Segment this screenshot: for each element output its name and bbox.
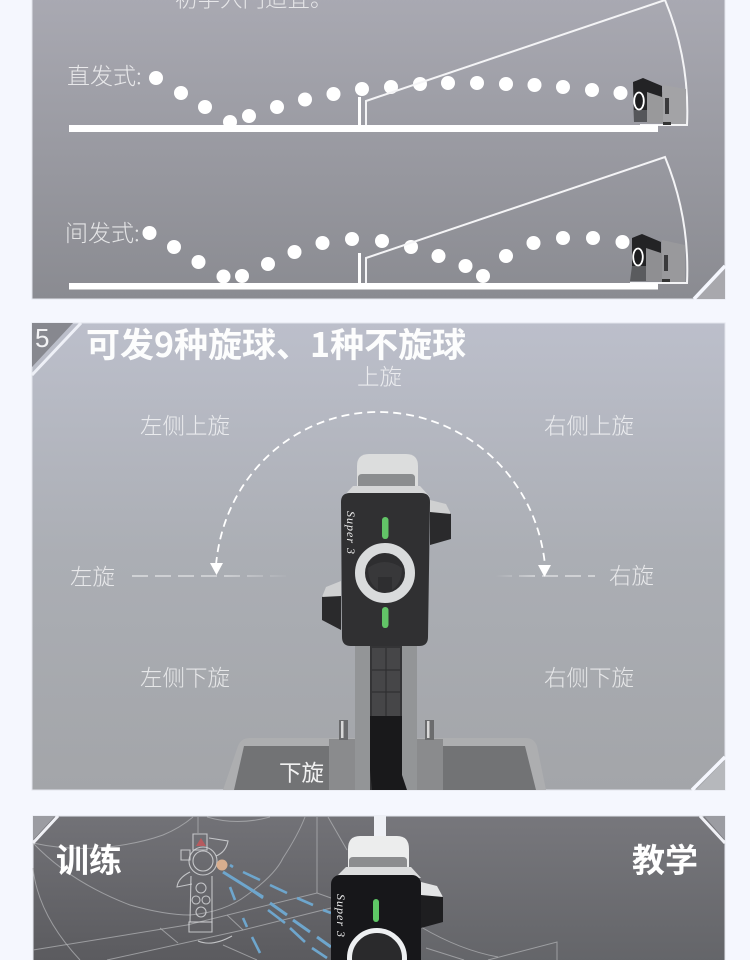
blue ball trajectories (223, 865, 331, 958)
mounting knobs (339, 720, 434, 740)
collar (335, 867, 421, 878)
brand mark: Super 3 (334, 894, 348, 938)
machine head (322, 454, 451, 646)
panel 1 background (32, 0, 725, 299)
spin labels: 左侧下旋 (140, 661, 230, 693)
wireframe court (33, 817, 557, 960)
dashed spin arc with arrows (210, 412, 551, 577)
panel: training and teaching (33, 816, 725, 960)
table and sector: direct serve (69, 0, 687, 132)
corner accent left (33, 816, 58, 843)
corner accent (694, 266, 725, 299)
ring (360, 548, 410, 598)
table and sector: indirect serve (69, 157, 687, 290)
corner accent with number (32, 323, 81, 375)
white top cap (357, 454, 418, 488)
spin labels: 右侧上旋 (544, 409, 634, 441)
spin labels: 上旋 (357, 360, 402, 392)
right wing (430, 511, 451, 545)
white collar (343, 486, 430, 497)
small machine: indirect serve (630, 234, 685, 282)
left wing top (322, 581, 341, 597)
right wing top (430, 500, 451, 514)
panel 2 background (32, 323, 725, 790)
right wing (421, 894, 443, 928)
right wing top (421, 882, 443, 897)
orange ball (216, 860, 228, 870)
panel title: 可发9种旋球、1种不旋球 (86, 318, 466, 367)
left dashed axis (132, 575, 290, 577)
left half background (34, 817, 374, 960)
spin labels: 右旋 (609, 559, 654, 591)
pillar (355, 646, 417, 790)
panel 3 background (33, 816, 725, 960)
white cap (348, 836, 409, 870)
ring (350, 930, 404, 960)
brand mark: Super 3 (344, 511, 358, 555)
panel: spin types (32, 318, 725, 790)
panel: serve trajectories (32, 0, 725, 299)
left wing (322, 596, 341, 630)
red marker on wireframe (196, 838, 206, 846)
wireframe machine (177, 834, 232, 943)
lower green light (382, 607, 388, 628)
gray cap recess (358, 474, 415, 488)
corner accent right (700, 816, 725, 843)
direct serve ball path (149, 71, 628, 129)
spin labels: 下旋 (279, 756, 324, 788)
black body (331, 875, 421, 960)
black body (341, 493, 430, 646)
spin labels: 右侧下旋 (544, 661, 634, 693)
spin labels: 左侧上旋 (140, 409, 230, 441)
heading: training: 训练 (56, 834, 122, 882)
indirect serve ball path (142, 226, 630, 284)
ring aperture detail (368, 562, 402, 590)
corner accent (692, 757, 725, 790)
machine front (331, 836, 443, 960)
spin labels (70, 360, 654, 788)
spin labels: 左旋 (70, 560, 115, 592)
green light (373, 899, 379, 922)
corner accent with number: 5 (35, 323, 49, 353)
label: indirect serve: 间发式: (65, 214, 140, 248)
label: direct serve: 直发式: (67, 57, 142, 91)
gray recess (349, 857, 407, 869)
upper green light (382, 517, 388, 539)
right dashed axis (496, 575, 595, 577)
cable above machine (374, 816, 386, 840)
heading: teaching: 教学 (632, 834, 698, 882)
small machine: direct serve (633, 78, 686, 125)
tray (223, 738, 546, 790)
